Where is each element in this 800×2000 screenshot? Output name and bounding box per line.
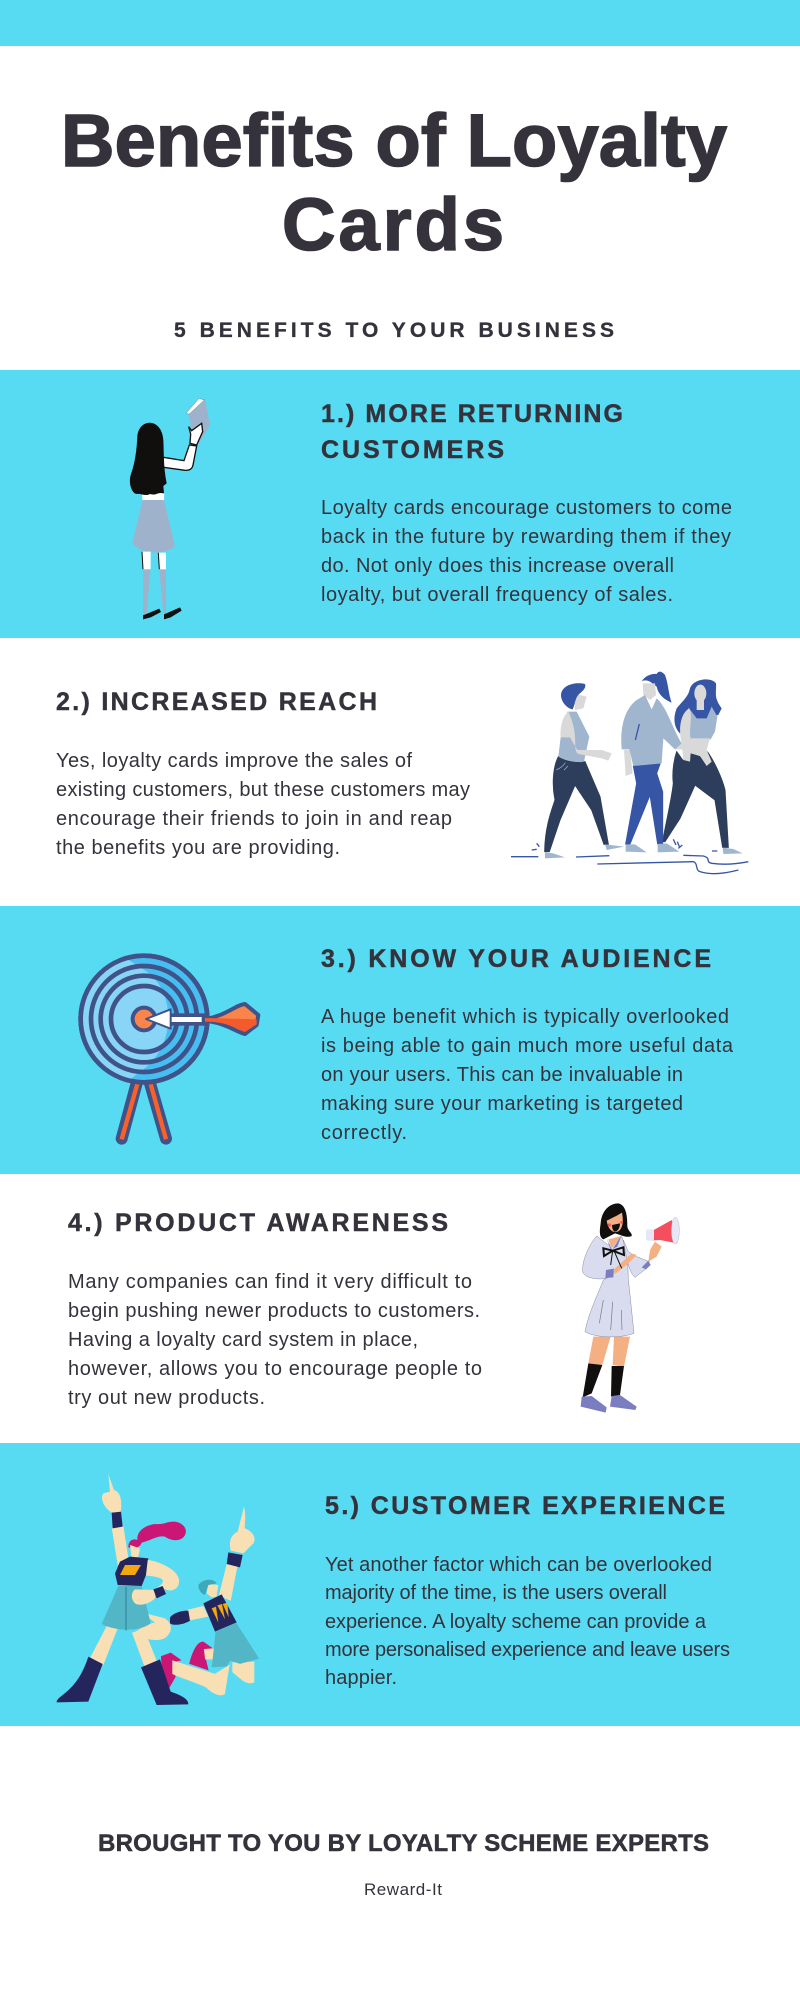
title: Cards (282, 183, 504, 266)
text: benefit 2 body (56, 750, 470, 859)
panel: benefit 1 more returning customers (0, 370, 800, 638)
icon: three people walking (511, 672, 748, 874)
panel: benefit 4 product awareness (68, 1203, 679, 1413)
text: benefit 2 body: Yes, loyalty cards improve the sales of (56, 750, 412, 772)
footer heading: BROUGHT TO YOU BY LOYALTY SCHEME EXPERTS (98, 1830, 709, 1857)
person right hair and body drawn behind (674, 679, 722, 733)
text: benefit 5 body (325, 1554, 730, 1689)
person left (545, 757, 608, 852)
text: benefit 4 body: however, allows you to encourage people to (68, 1358, 482, 1380)
text: benefit 2 body: existing customers, but these customers may (56, 779, 470, 801)
icon: woman with megaphone (581, 1203, 679, 1413)
title: Benefits of Loyalty (61, 99, 727, 182)
text: benefit 1 body: Loyalty cards encourage customers to come (321, 497, 732, 519)
text: benefit 5 body: experience. A loyalty scheme can provide a (325, 1611, 707, 1633)
text: benefit 5 body: Yet another factor which can be overlooked (325, 1554, 712, 1576)
heading: benefit 4: 4.) PRODUCT AWARENESS (68, 1209, 448, 1237)
text: benefit 5 body: happier. (325, 1667, 397, 1689)
text: benefit 4 body (68, 1271, 482, 1409)
heading: benefit 1: CUSTOMERS (321, 436, 504, 464)
text: benefit 1 body (321, 497, 732, 606)
text: benefit 1 body: do. Not only does this increase overall (321, 555, 674, 577)
ground lines (511, 839, 748, 874)
icon: target with dart (81, 956, 258, 1139)
heading: benefit 2: 2.) INCREASED REACH (56, 688, 377, 716)
text: benefit 4 body: try out new products. (68, 1387, 265, 1409)
icon: two dancers pointing up (57, 1474, 258, 1705)
heading: benefit 5: 5.) CUSTOMER EXPERIENCE (325, 1492, 725, 1520)
subtitle: 5 BENEFITS TO YOUR BUSINESS (174, 319, 614, 342)
text: benefit 4 body: Having a loyalty card system in place, (68, 1329, 418, 1351)
right dancer (162, 1642, 212, 1687)
text: benefit 4 body: Many companies can find it very difficult to (68, 1271, 472, 1293)
text: benefit 3 body: A huge benefit which is typically overlooked (321, 1006, 729, 1028)
text: benefit 3 body: is being able to gain much more useful data (321, 1035, 734, 1057)
text: benefit 3 body (321, 1006, 734, 1144)
panel: benefit 5 customer experience (0, 1443, 800, 1726)
text: benefit 5 body: majority of the time, is the users overall (325, 1582, 667, 1604)
text: benefit 1 body: back in the future by rewarding them if they (321, 526, 731, 548)
text: benefit 5 body: more personalised experience and leave users (325, 1639, 730, 1661)
text: benefit 3 body: correctly. (321, 1122, 407, 1144)
panel: benefit 2 increased reach (56, 672, 748, 874)
person middle (642, 672, 672, 703)
heading: benefit 1: 1.) MORE RETURNING (321, 400, 623, 428)
text: benefit 2 body: encourage their friends to join in and reap (56, 808, 452, 830)
heading: benefit 3: 3.) KNOW YOUR AUDIENCE (321, 945, 711, 973)
text: benefit 3 body: making sure your marketing is targeted (321, 1093, 683, 1115)
footer source name: Reward-It (364, 1880, 442, 1899)
panel: benefit 3 know your audience (0, 906, 800, 1174)
title (61, 99, 727, 266)
heading: benefit 1 (321, 400, 623, 464)
text: benefit 2 body: the benefits you are providing. (56, 837, 340, 859)
left dancer (91, 1625, 156, 1665)
top colour bar (0, 0, 800, 46)
icon: girl holding up a book (130, 398, 210, 619)
text: benefit 1 body: loyalty, but overall frequency of sales. (321, 584, 673, 606)
text: benefit 4 body: begin pushing newer products to customers. (68, 1300, 480, 1322)
text: benefit 3 body: on your users. This can be invaluable in (321, 1064, 683, 1086)
